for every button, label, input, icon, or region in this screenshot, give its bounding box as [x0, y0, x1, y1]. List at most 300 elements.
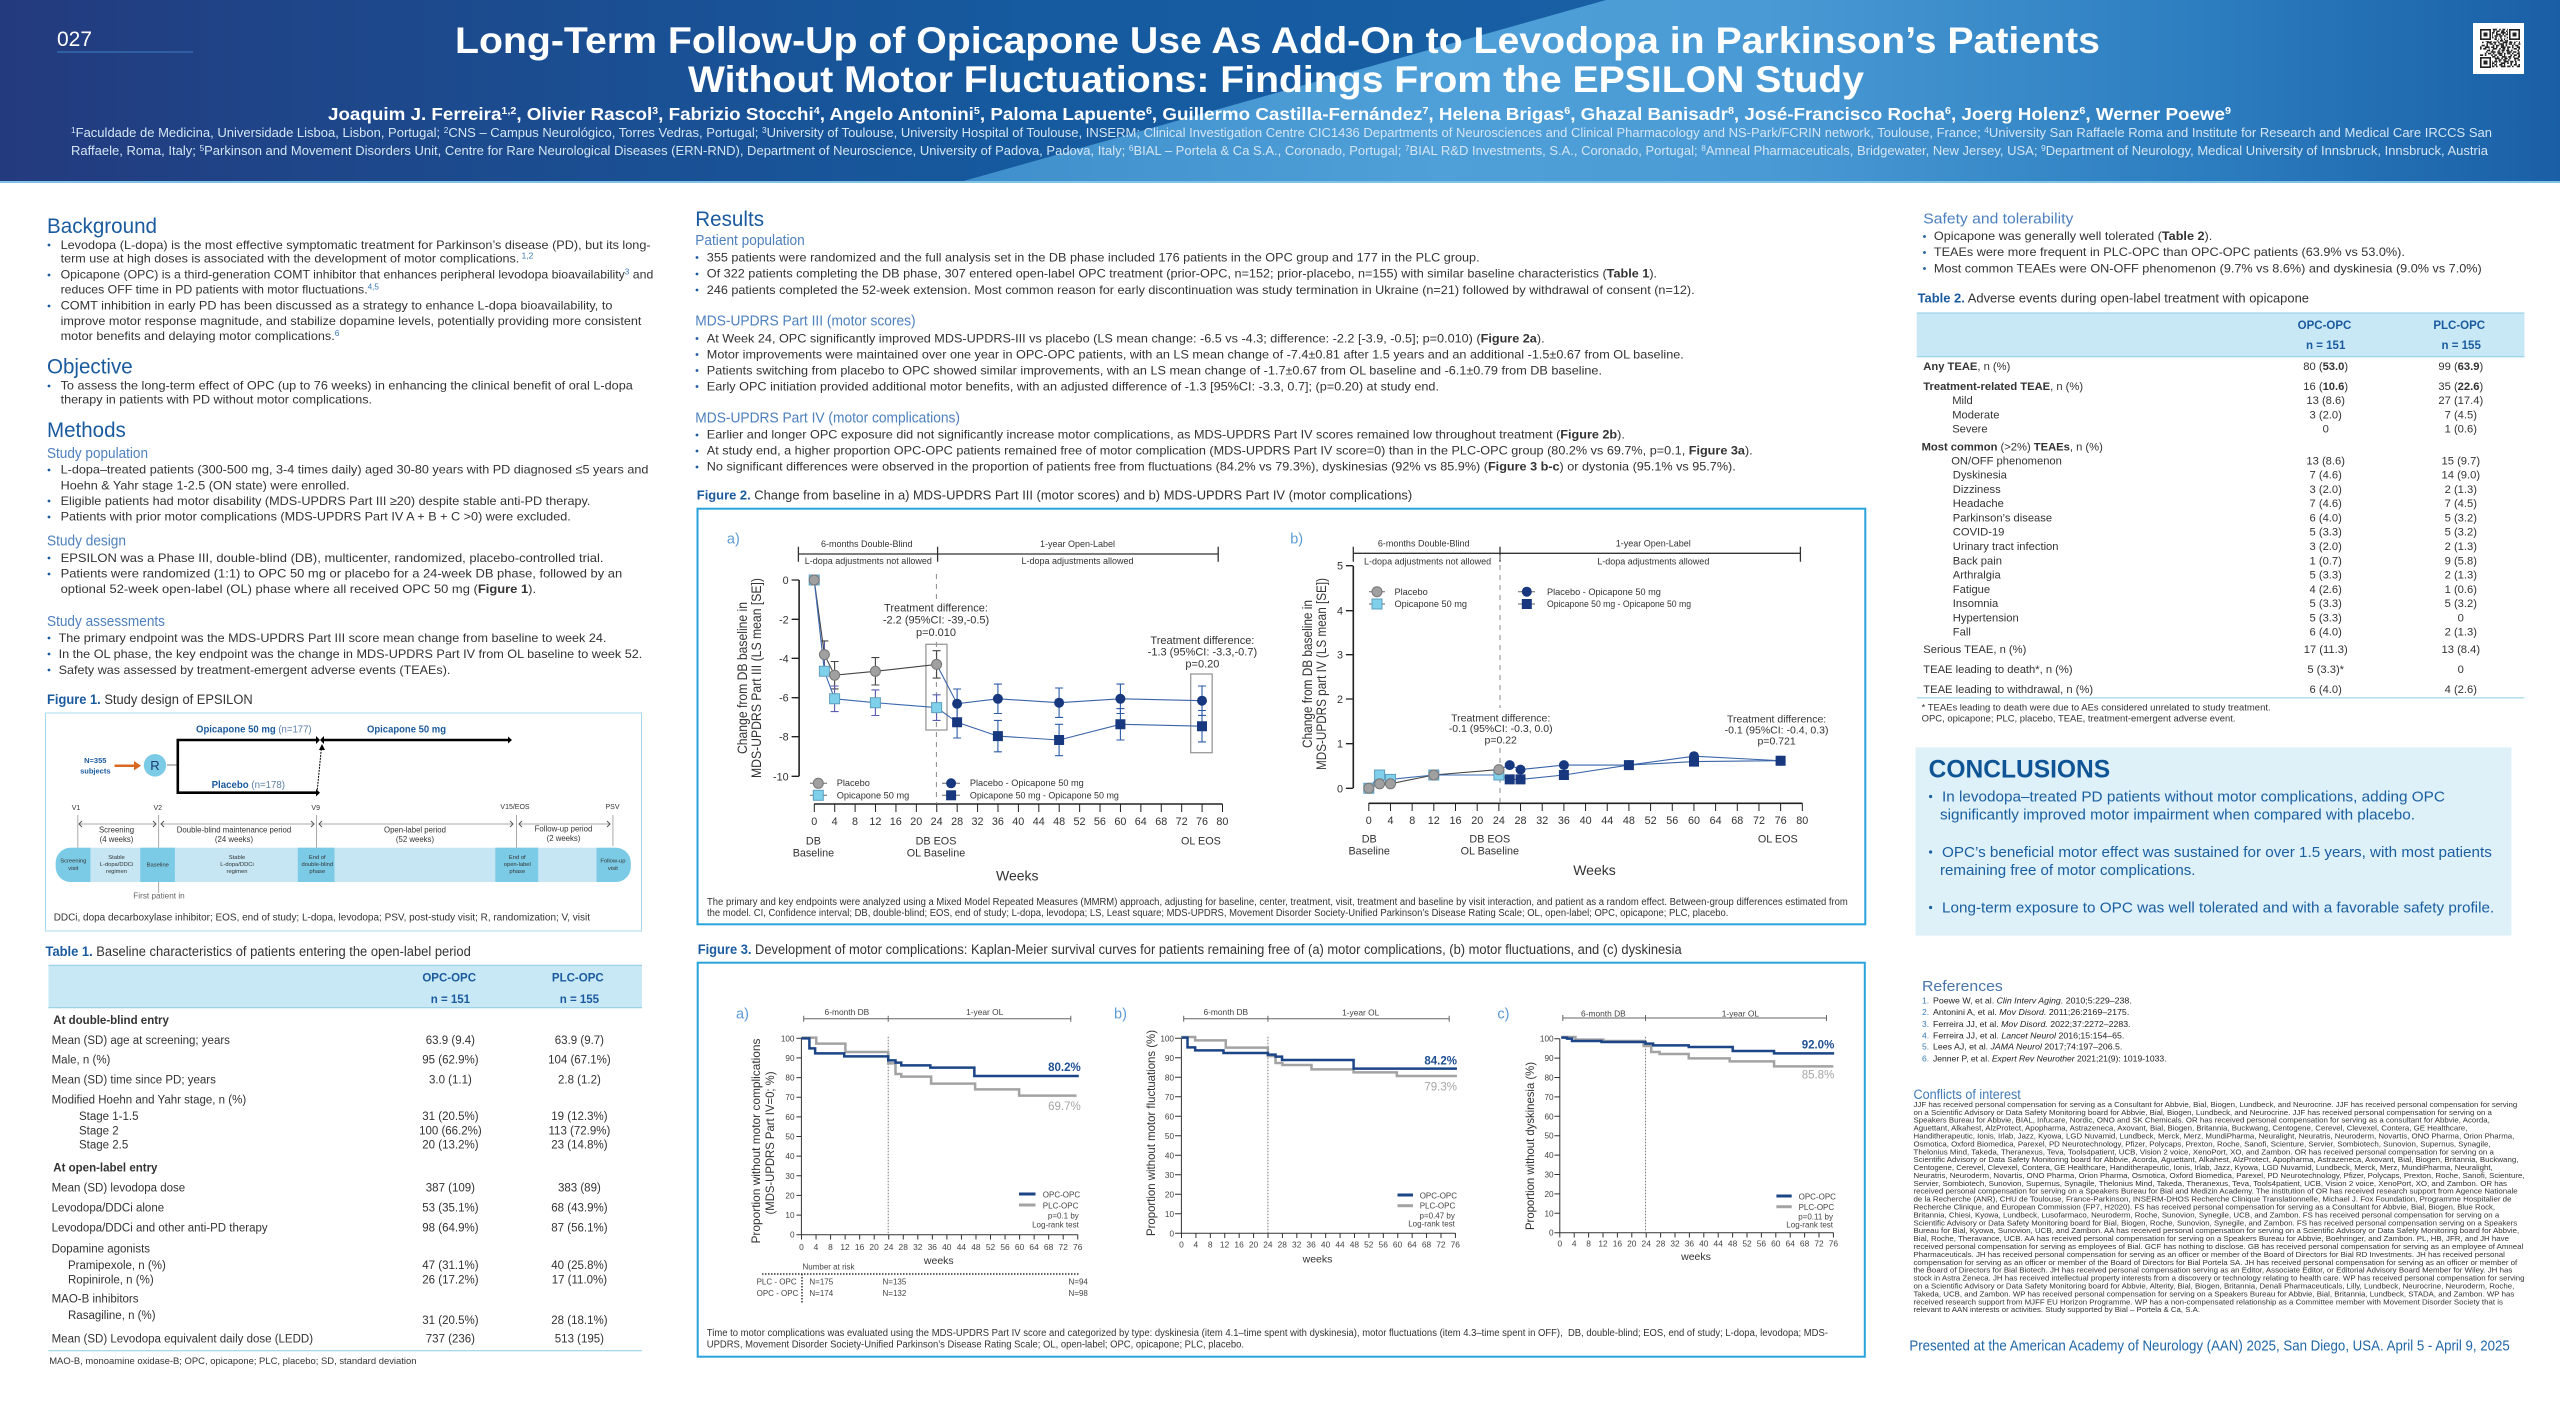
axes: 40 — [1544, 1151, 1554, 1160]
x axis: 28 — [1514, 815, 1527, 827]
period bracket — [1563, 1009, 1826, 1021]
axes: 64 — [1407, 1239, 1417, 1249]
table 1 PLC-OPC values: 68 (43.9%) — [551, 1202, 608, 1214]
table 1 labels: At open-label entry — [53, 1163, 158, 1175]
legend: p=0.47 by — [1420, 1211, 1455, 1220]
authors: 3 — [652, 106, 659, 117]
x axis: DB EOS — [1469, 833, 1510, 845]
period bracket: 1-year OL — [1342, 1008, 1380, 1018]
axes: 28 — [899, 1242, 908, 1252]
subheading: MDS-UPDRS Part IV: MDS-UPDRS Part IV (motor complications) — [695, 410, 960, 426]
conflicts text: stock in Astra Zeneca. JH has received intellectual property interests from a discovery or technology relating to health care. WP has received personal compensation for serving — [1914, 1274, 2524, 1283]
timeline bar: Screening — [60, 859, 86, 865]
subheading: study population: Study population — [47, 446, 148, 462]
period bracket: 6-month DB — [825, 1007, 870, 1017]
figure 2 footnote: the model. CI, Confidence interval; DB, double-blind; EOS, end of study; L-dopa, levodopa; LS, Least square; MDS-UPDRS, Movement Disorder Society-Unified Parkinson’s Disease Rating Scale; OL, open-label; OPC, opicapone; PLC, placebo. — [707, 908, 1728, 919]
x axis: 12 — [869, 816, 881, 828]
number at risk table: OPC - OPC — [757, 1289, 799, 1298]
table 1 labels: Ropinirole, n (%) — [68, 1274, 154, 1286]
conflicts text: Speakers Bureau for Abbvie, BIAL, Infucare, Nordic, ONO and SK Chemicals. OR has received personal compensation for serving as a consultant for Abbvie, Acorda, — [1914, 1116, 2490, 1125]
table 1 PLC-OPC values: 87 (56.1%) — [551, 1222, 608, 1234]
affiliations — [71, 126, 2492, 158]
table 2 PLC-OPC values: 13 (8.4) — [2442, 644, 2480, 656]
panel label c: c) — [1497, 1006, 1509, 1022]
table 2 labels: Most common (>2%) TEAEs, n (%) — [1922, 441, 2103, 453]
timeline bar: phase — [309, 869, 325, 875]
background bullets: COMT inhibition in early PD has been discussed as a strategy to enhance L-dopa bioavailability, to — [61, 299, 613, 313]
study population bullets: Patients with prior motor complications (MDS-UPDRS Part IV A + B + C >0) were excluded. — [61, 510, 571, 524]
axes: 12 — [840, 1242, 850, 1252]
affiliations: Amneal Pharmaceuticals, Bridgewater, New Jersey, USA; — [1706, 144, 2041, 158]
references list: 6. — [1922, 1053, 1929, 1063]
end values — [1802, 1040, 1834, 1081]
references list: Ferreira JJ, et al. Lancet Neurol 2016;15:154–65. — [1933, 1030, 2124, 1040]
part III bullets: Motor improvements were maintained over one year in OPC-OPC patients, with an LS mean change of -7.4±0.81 after 1.5 years and an additional -1.5±0.67 from OL baseline. — [707, 347, 1684, 361]
x axis: DB EOS — [916, 835, 956, 847]
table 2 labels: Moderate — [1952, 409, 1999, 421]
axes: weeks — [923, 1255, 954, 1267]
axes: 76 — [1829, 1239, 1838, 1249]
period bracket: 6-months Double-Blind — [1378, 539, 1469, 549]
panel: results — [695, 208, 1753, 474]
background bullets: Levodopa (L-dopa) is the most effective symptomatic treatment for Parkinson’s disease (PD), but its long- — [61, 238, 651, 252]
axes: 80 — [785, 1074, 795, 1083]
x axis: 48 — [1053, 816, 1065, 828]
period bracket: 1-year Open-Label — [1616, 539, 1691, 549]
authors: 6 — [2079, 106, 2086, 117]
table 2 OPC-OPC values: 3 (2.0) — [2310, 409, 2342, 421]
chart c: Kaplan-Meier dyskinesia — [1497, 1006, 1838, 1263]
period labels: (2 weeks) — [547, 834, 581, 843]
timeline bar: Follow-up — [600, 859, 625, 865]
axes: 100 — [1160, 1034, 1174, 1043]
table 2 PLC-OPC values: 2 (1.3) — [2445, 627, 2477, 639]
axes: 90 — [785, 1054, 795, 1063]
axes: 60 — [1165, 1112, 1174, 1121]
affiliations: 6 — [1129, 144, 1134, 153]
study population bullets — [48, 463, 648, 524]
x axis: 68 — [1155, 816, 1167, 828]
study assessments bullets: Safety was assessed by treatment-emergent adverse events (TEAEs). — [59, 663, 450, 677]
legend — [810, 778, 1119, 800]
axes: 56 — [1379, 1239, 1388, 1249]
number at risk table: N=135 — [882, 1278, 907, 1287]
series markers — [1364, 751, 1786, 793]
randomization circle: R — [150, 758, 160, 773]
first patient in label: First patient in — [133, 892, 185, 901]
table 2 OPC-OPC values: 5 (3.3) — [2310, 612, 2342, 624]
x axis: 60 — [1688, 815, 1700, 827]
conclusions bullets: significantly improved motor impairment when compared with placebo. — [1940, 807, 2415, 824]
legend: PLC-OPC — [1799, 1203, 1834, 1212]
x axis: DB — [1362, 833, 1377, 845]
panel label b: b) — [1290, 531, 1303, 547]
axes: 16 — [855, 1242, 865, 1252]
part IV bullets: At study end, a higher proportion OPC-OPC patients remained free of motor complication (MDS-UPDRS Part IV score=0) than in the PLC-OPC group (80.2% vs 69.7%, p=0.1, Figure 3a). — [707, 444, 1753, 458]
title: Without Motor Fluctuations: Findings From the EPSILON Study — [688, 59, 1864, 100]
table 2 OPC-OPC values: 7 (4.6) — [2310, 498, 2342, 510]
patient population bullets: 355 patients were randomized and the full analysis set in the DB phase included 176 patients in the OPC group and 177 in the PLC group. — [707, 250, 1480, 264]
table 1 PLC-OPC values — [548, 1035, 611, 1346]
timeline bar: End of — [309, 855, 326, 861]
conclusions bullets: Long-term exposure to OPC was well tolerated and with a favorable safety profile. — [1942, 899, 2494, 916]
table 2 labels: Hypertension — [1953, 612, 2019, 624]
x axis: 80 — [1796, 815, 1808, 827]
axes: 60 — [1544, 1112, 1554, 1121]
x axis: 76 — [1196, 816, 1208, 828]
legend — [1776, 1192, 1836, 1229]
axes: 20 — [869, 1242, 879, 1252]
arm labels: Placebo (n=178) — [212, 779, 285, 791]
table 2 labels: Mild — [1952, 395, 1973, 407]
table 2 header: n = 151 — [2306, 340, 2346, 352]
legend: p=0.11 by — [1798, 1212, 1833, 1221]
timeline bar — [56, 848, 631, 882]
axes: 20 — [1165, 1190, 1174, 1199]
axes: 32 — [1292, 1239, 1302, 1249]
visit labels: V2 — [154, 805, 162, 812]
axes: 40 — [942, 1242, 952, 1252]
period labels: (52 weeks) — [396, 835, 434, 844]
heading: Results: Results — [695, 208, 764, 231]
arm labels: Opicapone 50 mg — [367, 724, 446, 736]
axes: 0 — [1179, 1239, 1184, 1249]
table 2 labels: Severe — [1952, 423, 1988, 435]
enrolment label — [80, 756, 111, 776]
table 2 OPC-OPC values: 4 (2.6) — [2310, 584, 2342, 596]
background bullets: motor benefits and delaying motor complications. — [61, 329, 321, 343]
treatment difference annotations: -0.1 (95%CI: -0.4, 0.3) — [1725, 724, 1829, 736]
table 2 labels: Arthralgia — [1953, 569, 2001, 581]
legend: OPC-OPC — [1043, 1190, 1080, 1199]
title — [455, 20, 2100, 100]
conclusions bullets — [1929, 788, 2494, 916]
subheading: safety: Safety and tolerability — [1923, 211, 2074, 227]
authors: , Joerg Holenz — [1951, 104, 2080, 124]
table 1 PLC-OPC values: 513 (195) — [555, 1334, 604, 1346]
conflicts text: Scientific Advisory or Data Safety Monitoring board for Abbvie, Acorda, Aguettant, Alkahest, AlzProtect, Apopharma, Astrazeneca, Axovant, Bial, Biogen, Britannia, Buckwang, — [1914, 1155, 2518, 1164]
table 2 title: Table 2. Adverse events during open-label treatment with opicapone — [1918, 290, 2309, 305]
x axis: 48 — [1623, 815, 1635, 827]
table 1 PLC-OPC values: 383 (89) — [558, 1182, 601, 1194]
axes: 30 — [785, 1172, 795, 1181]
x axis: Baseline — [1348, 846, 1390, 858]
axes: Proportion without motor fluctuations (%) — [1144, 1030, 1158, 1236]
legend: Log-rank test — [1032, 1220, 1080, 1229]
timeline bar: visit — [608, 866, 618, 872]
authors: 9 — [2225, 106, 2231, 117]
number at risk table: Number at risk — [802, 1262, 856, 1271]
legend — [1019, 1190, 1080, 1229]
number at risk table: N=175 — [809, 1278, 834, 1287]
axes: 64 — [1786, 1239, 1795, 1249]
footer: presentation note: Presented at the American Academy of Neurology (AAN) 2025, San Diego, USA. April 5 - April 9, 2025 — [1909, 1339, 2510, 1355]
objective text: therapy in patients with PD without motor complications. — [61, 392, 372, 406]
figure 1 title: Figure 1. Study design of EPSILON — [47, 692, 253, 707]
axes: 40 — [1699, 1239, 1709, 1249]
x axis: 36 — [992, 816, 1004, 828]
axes: 28 — [1656, 1239, 1666, 1249]
visit labels: V15/EOS — [500, 804, 530, 811]
table 1 header: OPC-OPC — [422, 973, 476, 985]
study design bullets: optional 52-week open-label (OL) phase where all received OPC 50 mg ( Figure 1 ). — [61, 582, 536, 596]
authors: 5 — [974, 106, 980, 117]
table 2 PLC-OPC values: 9 (5.8) — [2445, 555, 2477, 567]
conflicts text: Scientific Advisory or Data Safety Monitoring board for Bial, Biogen, Roche, Sunovion, Synegile, and Zambon. FS has received personal compensation serving on a Speakers — [1914, 1218, 2517, 1227]
axes: 8 — [1586, 1239, 1591, 1249]
chart a: Kaplan-Meier motor complications — [736, 1006, 1088, 1303]
safety bullets: Opicapone was generally well tolerated ( Table 2). — [1934, 229, 2212, 243]
axes: 24 — [1642, 1239, 1651, 1249]
table 1 labels: Mean (SD) levodopa dose — [52, 1182, 185, 1194]
y axis: -8 — [779, 732, 789, 744]
table 2 labels: TEAE leading to death*, n (%) — [1923, 664, 2073, 676]
x axis: 40 — [1580, 815, 1592, 827]
axes: 90 — [1165, 1054, 1174, 1063]
x axis: 4 — [1387, 815, 1394, 827]
table 2 labels: Back pain — [1953, 555, 2002, 567]
y axis — [1300, 561, 1353, 795]
background bullets — [48, 238, 653, 343]
table 1 PLC-OPC values: 40 (25.8%) — [551, 1260, 608, 1272]
table 1 PLC-OPC values: 19 (12.3%) — [551, 1111, 608, 1123]
references list: 2. — [1922, 1007, 1929, 1017]
references list: Jenner P, et al. Expert Rev Neurother 2021;21(9): 1019-1033. — [1933, 1053, 2166, 1063]
panel: figure 2 — [698, 509, 1865, 924]
table 2 PLC-OPC values: 99 (63.9) — [2438, 361, 2483, 373]
affiliations: CNS – Campus Neurológico, Torres Vedras, Portugal; — [448, 126, 762, 140]
treatment difference annotations: p=0.721 — [1757, 736, 1796, 748]
end values: 84.2% — [1424, 1055, 1457, 1067]
axes: 4 — [1193, 1239, 1198, 1249]
part IV bullets: No significant differences were observed in the proportion of patients free from fluctuations (84.2% vs 79.3%), dyskinesias (92% vs 85.9%) ( Figure 3 b-c ) or dystonia (95.1% vs 95.7%). — [707, 460, 1736, 474]
affiliations: Department of Neurology, Medical University of Innsbruck, Innsbruck, Austria — [2046, 144, 2488, 158]
axes: 16 — [1613, 1239, 1622, 1249]
authors: , Olivier Rascol — [516, 104, 652, 124]
references list: 1. — [1922, 996, 1929, 1006]
authors: , Werner Poewe — [2085, 104, 2225, 124]
end values — [1048, 1062, 1081, 1113]
y axis: -10 — [773, 771, 789, 783]
legend: OPC-OPC — [1420, 1191, 1457, 1200]
authors: , Guillermo Castilla-Fernández — [1152, 104, 1423, 124]
table 1 OPC-OPC values: 26 (17.2%) — [422, 1274, 479, 1286]
table 1 PLC-OPC values: 28 (18.1%) — [551, 1315, 608, 1327]
table 2 labels: Urinary tract infection — [1953, 541, 2059, 553]
period bracket: 6-month DB — [1581, 1009, 1626, 1019]
title: Long-Term Follow-Up of Opicapone Use As Add-On to Levodopa in Parkinson’s Patients — [455, 20, 2100, 61]
table 2 PLC-OPC values: 2 (1.3) — [2445, 569, 2477, 581]
visit labels: PSV — [605, 804, 620, 811]
axes: 48 — [1350, 1239, 1359, 1249]
affiliations: 7 — [1405, 144, 1410, 153]
references list: Lees AJ, et al. JAMA Neurol 2017;74:197–206.5. — [1933, 1042, 2122, 1052]
heading: Methods: Methods — [47, 419, 126, 442]
timeline lines — [78, 815, 613, 893]
period bracket — [1353, 539, 1800, 567]
y axis: 3 — [1337, 650, 1343, 662]
table 1 header — [48, 965, 642, 1008]
conflicts text: relevant to AAN interests or activities. Study supported by Bial – Portela & Ca, S.A. — [1914, 1305, 2200, 1314]
axes: 68 — [1422, 1239, 1431, 1249]
conclusions bullets: In levodopa–treated PD patients without motor complications, adding OPC — [1942, 788, 2445, 805]
table 1 labels: Pramipexole, n (%) — [68, 1260, 166, 1272]
axes: 60 — [1771, 1239, 1781, 1249]
x axis: 56 — [1094, 816, 1106, 828]
x axis: 44 — [1033, 816, 1045, 828]
table 2 labels: Parkinson’s disease — [1953, 512, 2052, 524]
table 2 labels: Treatment-related TEAE, n (%) — [1923, 381, 2083, 393]
table 1 PLC-OPC values: 2.8 (1.2) — [558, 1075, 601, 1087]
panel: figure 3 — [698, 963, 1865, 1357]
axes: 24 — [884, 1242, 894, 1252]
x axis: OL EOS — [1758, 833, 1798, 845]
table 1 PLC-OPC values: 63.9 (9.7) — [555, 1035, 604, 1047]
axes: 0 — [1169, 1229, 1174, 1238]
table 1 labels: Stage 2.5 — [79, 1140, 128, 1152]
axes: 60 — [785, 1113, 795, 1122]
table 2 OPC-OPC values: 5 (3.3) — [2310, 527, 2342, 539]
legend: Log-rank test — [1408, 1220, 1456, 1229]
table 2 labels: Dizziness — [1953, 484, 2001, 496]
timeline bar: Baseline — [147, 863, 169, 869]
axes: 4 — [814, 1242, 819, 1252]
treatment difference annotations: Treatment difference: — [1727, 714, 1826, 726]
table 1 baseline characteristics — [48, 965, 642, 1367]
series markers — [809, 575, 1207, 745]
axes: 36 — [1306, 1239, 1316, 1249]
period labels: Follow-up period — [535, 825, 592, 834]
affiliations: BIAL R&D Investments, S.A., Coronado, Portugal; — [1410, 144, 1701, 158]
table 2 labels: Fatigue — [1953, 584, 1990, 596]
conflicts text: Thelonius Mind, Takeda, Theranexus, Teva, Tools4patient, UCB, Vision 2 voice, XenoPort, XO, and Zambon. OR has received personal compensation for serving on a — [1914, 1147, 2495, 1156]
x axis: 0 — [1366, 815, 1372, 827]
table 2 OPC-OPC values: 3 (2.0) — [2310, 484, 2342, 496]
authors: , Paloma Lapuente — [980, 104, 1146, 124]
conflicts text: Servier, Sombiotech, Sunovion, Supernus, Synagile, Thelonius Mind, Takeda, Theranexus, Teva, Tools4patient, UCB, Vision 2 voice, XenoPort, XO, and Zambon. OR has — [1914, 1179, 2507, 1188]
table 1 header: n = 151 — [431, 994, 471, 1006]
timeline bar: Stable — [229, 855, 245, 861]
axes: 48 — [1728, 1239, 1738, 1249]
background bullets: 3 — [625, 268, 630, 277]
background bullets: reduces OFF time in PD patients with motor fluctuations. — [61, 283, 361, 297]
timeline bar: L-dopa/DDCi — [100, 862, 133, 868]
heading: Background: Background — [47, 215, 157, 238]
period bracket: 1-year OL — [1722, 1009, 1759, 1019]
axes: 10 — [1165, 1210, 1174, 1219]
objective text: To assess the long-term effect of OPC (up to 76 weeks) in enhancing the clinical benefit of oral L-dopa — [61, 379, 633, 393]
objective text — [48, 379, 633, 406]
conflicts text: Handitherapeutic, Ionis, Irlab, Jazz, Kyowa, LGD Nuvamid, Lundbeck, Merck, Merz, MundiPharma, Neuralight, Neuratris, Neuroderm, Novartis, ONO Pharma, Orion Pharma, — [1914, 1132, 2514, 1140]
table 2 PLC-OPC values: 14 (9.0) — [2442, 470, 2480, 482]
affiliations: 5 — [199, 144, 205, 153]
axes: 72 — [1436, 1239, 1446, 1249]
survival curves — [1561, 1037, 1834, 1066]
table 1 OPC-OPC values: 31 (20.5%) — [422, 1111, 479, 1123]
legend: Opicapone 50 mg - Opicapone 50 mg — [1547, 599, 1691, 609]
y axis: 0 — [783, 575, 789, 587]
axes: 50 — [1544, 1132, 1554, 1141]
axes: 100 — [781, 1034, 795, 1043]
table 2 labels: Serious TEAE, n (%) — [1923, 644, 2027, 656]
number at risk table: N=174 — [809, 1289, 834, 1298]
panel: references — [1922, 978, 2166, 1063]
axes: 52 — [1742, 1239, 1752, 1249]
figure 3 footnote: Time to motor complications was evaluated using the MDS-UPDRS Part IV score and categorized by type: dyskinesia (item 4.1–time spent with dyskinesia), motor fluctuations (item 4.3–time spent in OFF), DB, double-blind; EOS, end of study; L-dopa, levodopa; MDS- — [707, 1328, 1828, 1339]
table 1 OPC-OPC values: 737 (236) — [426, 1334, 475, 1346]
table 2 labels: Insomnia — [1953, 598, 1999, 610]
treatment difference annotations: Treatment difference: — [1150, 635, 1254, 647]
x axis: 40 — [1012, 816, 1024, 828]
axes: 20 — [1544, 1190, 1554, 1199]
x axis: 0 — [811, 816, 817, 828]
y axis: -4 — [779, 653, 789, 665]
treatment difference annotations: -2.2 (95%CI: -39,-0.5) — [883, 615, 989, 627]
axes: 60 — [1015, 1242, 1025, 1252]
x axis: 60 — [1114, 816, 1126, 828]
x axis: Baseline — [793, 848, 834, 860]
y axis: 0 — [1337, 783, 1343, 795]
affiliations: 2 — [444, 126, 449, 135]
study population bullets: Eligible patients had motor disability (MDS-UPDRS Part III ≥20) despite stable anti-PD therapy. — [61, 494, 590, 508]
affiliations: 1 — [71, 126, 76, 135]
table 2 header: PLC-OPC — [2433, 320, 2485, 332]
axes: 12 — [1598, 1239, 1608, 1249]
axes: weeks — [1302, 1254, 1332, 1266]
table 1 OPC-OPC values — [419, 1035, 482, 1346]
axes: 50 — [785, 1132, 795, 1142]
end values: 80.2% — [1048, 1062, 1081, 1074]
authors: , Helena Brigas — [1428, 104, 1565, 124]
x axis: 24 — [1493, 815, 1505, 827]
poster number: 027 — [57, 28, 92, 51]
table 1 OPC-OPC values: 31 (20.5%) — [422, 1315, 479, 1327]
poster number — [57, 28, 193, 53]
y axis: MDS-UPDRS part IV (LS mean [SE]) — [1314, 578, 1329, 770]
axes: 40 — [1321, 1239, 1331, 1249]
affiliations: 3 — [762, 126, 767, 135]
references list — [1922, 996, 2166, 1063]
affiliations: 8 — [1701, 144, 1706, 153]
table 1 labels: Rasagiline, n (%) — [68, 1310, 156, 1322]
panel: conclusions — [1916, 747, 2511, 936]
part III bullets — [696, 331, 1684, 393]
conflicts text: received personal compensation for serving as employees of Bial. GCF has nothing to disclose. GB has received personal compensation for serving as an employee of Amneal — [1914, 1242, 2524, 1251]
legend: Placebo - Opicapone 50 mg — [970, 778, 1084, 788]
part III bullets: At Week 24, OPC significantly improved MDS-UPDRS-III vs placebo (LS mean change: -6.5 vs -4.3; difference: -2.2 [-3.9, -0.5]; p=0.010) ( Figure 2a). — [707, 331, 1545, 345]
number at risk table: N=94 — [1068, 1278, 1088, 1287]
table 2 labels: Any TEAE, n (%) — [1923, 361, 2011, 373]
background bullets: 1,2 — [519, 252, 534, 261]
table 2 PLC-OPC values: 1 (0.6) — [2445, 423, 2477, 435]
authors: 6 — [1945, 106, 1951, 117]
arrows: treatment arms — [167, 736, 512, 796]
axes: 68 — [1044, 1242, 1054, 1252]
x axis — [793, 804, 1228, 884]
conflicts text: Bureau for Bial, Kyowa, Sunovion, UCB, and Zambon. AA has received personal compensation for serving on a Scientific Advisory or Data Safety Monitoring board for Abbvie, — [1914, 1226, 2519, 1235]
table 2 OPC-OPC values: 13 (8.6) — [2306, 395, 2345, 407]
axes: 56 — [1757, 1239, 1766, 1249]
table 2 OPC-OPC values: 6 (4.0) — [2310, 512, 2342, 524]
legend — [1369, 587, 1691, 609]
background bullets: 6 — [335, 329, 340, 338]
treatment difference annotations: Treatment difference: — [884, 603, 988, 615]
references list: 3. — [1922, 1019, 1929, 1029]
table 1 footnote: MAO-B, monoamine oxidase-B; OPC, opicapone; PLC, placebo; SD, standard deviation — [49, 1356, 416, 1367]
axes: weeks — [1680, 1251, 1711, 1263]
panel label b: b) — [1114, 1006, 1127, 1022]
number at risk table — [757, 1262, 1088, 1303]
